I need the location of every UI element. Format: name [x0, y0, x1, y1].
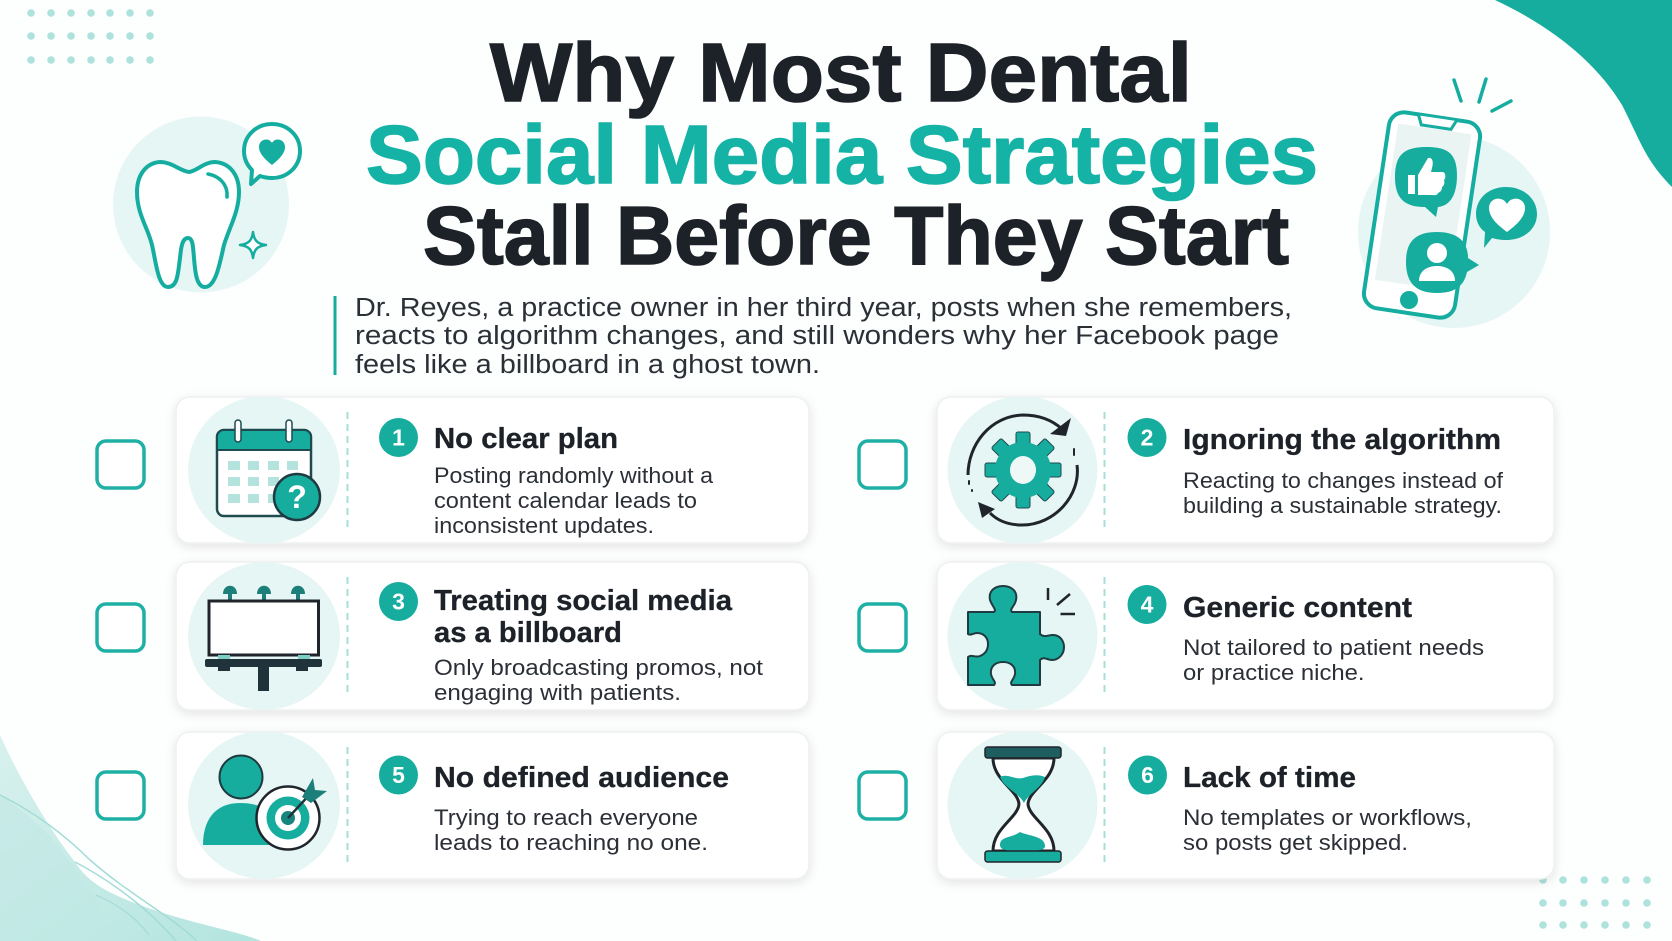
- body text: [1183, 468, 1504, 518]
- icon: tooth with heart bubble: [113, 116, 300, 292]
- body text: building a sustainable strategy.: [1183, 493, 1502, 518]
- body text: Trying to reach everyone: [434, 805, 698, 830]
- panel: card 4 generic content: [937, 562, 1554, 710]
- heading: Lack of time: [1183, 762, 1356, 794]
- heading: [434, 585, 733, 649]
- icon: calendar with question mark: ?: [287, 479, 307, 515]
- number badge 2: 2: [1141, 424, 1153, 450]
- title: Social Media Strategies: [366, 108, 1318, 201]
- heading: Generic content: [1183, 592, 1412, 624]
- title: [366, 26, 1318, 282]
- intro paragraph: Dr. Reyes, a practice owner in her third year, posts when she remembers,: [355, 294, 1292, 322]
- icon: puzzle piece: [968, 586, 1075, 685]
- number badge 1: [379, 418, 418, 457]
- heading: No defined audience: [434, 762, 729, 794]
- icon: billboard: [205, 586, 322, 691]
- panel: card 1 no clear plan: [176, 396, 809, 544]
- body text: Reacting to changes instead of: [1183, 468, 1504, 493]
- panel: card 5 no defined audience: [176, 731, 809, 879]
- checkbox 2: [859, 441, 906, 488]
- icon: gear with cycle arrows: [968, 415, 1077, 525]
- panel: card 3 treating social media as a billboard: [176, 562, 809, 710]
- body text: [1183, 635, 1484, 685]
- number badge 3: 3: [392, 588, 405, 614]
- number badge 5: [379, 756, 418, 794]
- body text: Posting randomly without a: [434, 463, 714, 488]
- number badge 6: [1128, 756, 1167, 794]
- checkbox 3: [97, 604, 144, 651]
- checkbox 1: [97, 441, 144, 488]
- body text: Only broadcasting promos, not: [434, 655, 763, 680]
- body text: or practice niche.: [1183, 660, 1364, 685]
- panel: card 2 ignoring the algorithm: [937, 396, 1554, 544]
- decorative blob: top right: [1495, 0, 1672, 187]
- icon: hourglass: [985, 747, 1061, 862]
- intro paragraph: feels like a billboard in a ghost town.: [355, 351, 820, 379]
- body text: engaging with patients.: [434, 680, 681, 705]
- body text: Not tailored to patient needs: [1183, 635, 1484, 660]
- checkbox 6: [859, 772, 906, 819]
- number badge 2: [1128, 418, 1166, 457]
- number badge 3: [379, 582, 418, 621]
- number badge 1: 1: [392, 424, 405, 450]
- heading: Ignoring the algorithm: [1183, 424, 1501, 456]
- number badge 5: 5: [392, 762, 405, 788]
- number badge 4: [1128, 585, 1166, 624]
- decorative blob: bottom left: [0, 735, 261, 941]
- dot grid: bottom right: [1539, 876, 1651, 929]
- checkbox 4: [859, 604, 906, 651]
- body text: leads to reaching no one.: [434, 830, 708, 855]
- body text: so posts get skipped.: [1183, 830, 1408, 855]
- panel: card 6 lack of time: [937, 731, 1554, 879]
- intro paragraph: [334, 294, 1292, 379]
- intro paragraph: reacts to algorithm changes, and still wonders why her Facebook page: [355, 322, 1279, 350]
- body text: No templates or workflows,: [1183, 805, 1472, 830]
- number badge 4: 4: [1141, 592, 1154, 618]
- body text: inconsistent updates.: [434, 513, 654, 538]
- heading: No clear plan: [434, 423, 618, 455]
- body text: [434, 805, 708, 855]
- checkbox 5: [97, 772, 144, 819]
- title: Stall Before They Start: [423, 189, 1289, 282]
- title: Why Most Dental: [490, 26, 1192, 119]
- heading: as a billboard: [434, 617, 622, 649]
- icon: phone with social bubbles: [1358, 79, 1550, 328]
- body text: [1183, 805, 1472, 855]
- dot grid: top left: [27, 9, 154, 64]
- body text: [434, 655, 763, 705]
- icon: calendar with question mark: [217, 420, 320, 520]
- body text: content calendar leads to: [434, 488, 697, 513]
- number badge 6: 6: [1141, 762, 1154, 788]
- icon: person with target: [203, 756, 327, 850]
- body text: [434, 463, 714, 538]
- heading: Treating social media: [434, 585, 733, 617]
